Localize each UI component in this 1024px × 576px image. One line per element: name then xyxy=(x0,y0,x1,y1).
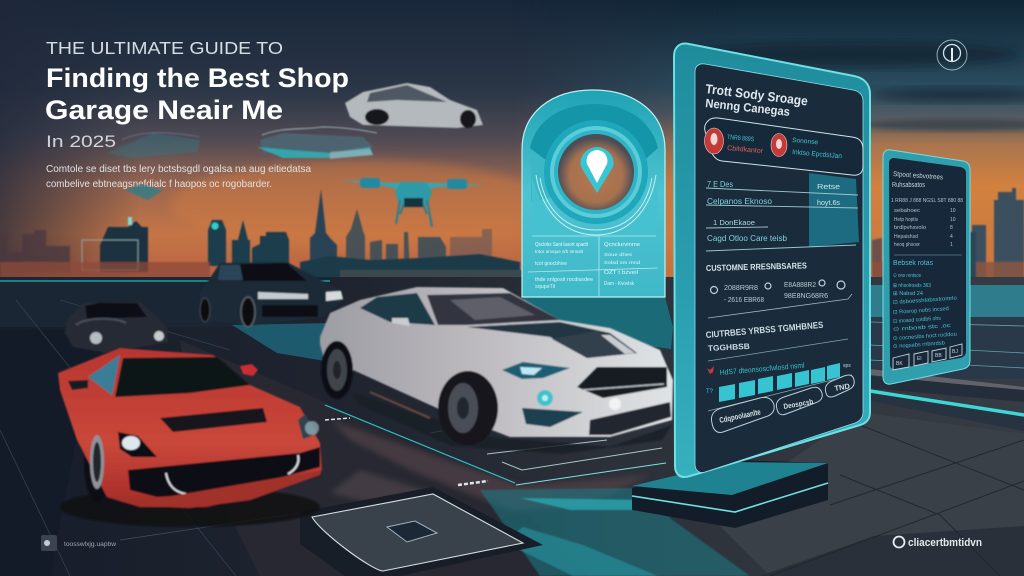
side panel list xyxy=(893,260,957,350)
year subtitle: In 2025 xyxy=(46,132,116,151)
side panel buttons: BK xyxy=(896,361,903,367)
floor charging pad xyxy=(300,487,543,576)
arch info text: squpsTil xyxy=(535,284,555,290)
side panel table: sebahoec xyxy=(894,208,921,214)
side panel buttons xyxy=(893,344,962,370)
customer reviews section xyxy=(706,260,845,304)
drone xyxy=(340,178,487,227)
features section: sps xyxy=(843,363,851,369)
arch info text: tntor anvque s/b smsalt xyxy=(535,249,584,254)
eyebrow heading: THE ULTIMATE GUIDE TO xyxy=(46,38,283,58)
recommended shops card: Cbitdkantor xyxy=(727,145,764,155)
customer reviews section: CUSTOMNE RRESNBSARES xyxy=(706,260,807,273)
water and lounge strip on the right xyxy=(870,285,1024,431)
side panel list: ⊞ Nabsd 24 xyxy=(893,291,923,297)
side panel heading: Stpoot esbvotrees xyxy=(893,171,944,182)
panel: location arch hologram xyxy=(522,90,673,349)
main title line 1: Finding the Best Shop xyxy=(46,63,349,93)
customer reviews section: E8A888R2 xyxy=(784,280,816,289)
side panel list: ⊙ nogsabs rnbnrdsb xyxy=(893,340,945,350)
side panel list: ⊙ ons rontsos xyxy=(893,273,921,279)
rating swatches xyxy=(719,363,840,402)
main title line 2: Garage Neair Me xyxy=(45,95,283,125)
arch info text: Soue dhes xyxy=(604,252,633,257)
side panel list: Bebsek rotas xyxy=(893,260,933,267)
action buttons: Deospcsb xyxy=(783,397,814,411)
side panel list: ⊡ moaod cotdb6 ohs xyxy=(893,316,941,325)
title block xyxy=(45,38,349,190)
floating silver car xyxy=(345,83,483,128)
price comparison table: 7 E Des xyxy=(707,180,733,189)
car: red sports car xyxy=(58,348,322,527)
icon: brand mark xyxy=(894,536,904,548)
background: dusk sky xyxy=(0,0,1024,300)
footer brand bottom right: cliacertbmtidvn xyxy=(908,537,982,549)
side panel list: ⊙ rnbosb stc .oc xyxy=(893,323,951,333)
side panel list: ⊡ dsboesshtabsstromrlo xyxy=(893,296,957,306)
icon: info badge top right xyxy=(937,40,967,70)
action buttons: TND xyxy=(834,381,851,393)
price comparison table: Cagd Otloo Care teisb xyxy=(707,234,788,243)
features section: T? xyxy=(706,389,714,395)
recommended shops card xyxy=(704,118,863,175)
customer reviews section: - 2616 EBR68 xyxy=(724,295,764,304)
side panel table: 1 xyxy=(950,242,953,248)
hologram car outlines xyxy=(107,127,377,200)
panel stand base xyxy=(632,460,828,528)
action buttons xyxy=(711,375,854,433)
map circle xyxy=(558,134,634,210)
intro paragraph: Comtole se diset tbs lery bctsbsgdl ogalsa na aug eitiedatsa xyxy=(46,163,311,175)
price comparison table: Retse xyxy=(817,184,840,191)
icon: location pin xyxy=(580,147,614,193)
side panel buttons: BJ xyxy=(952,349,958,355)
footer tag bottom left: toosswlxjg.uapbw xyxy=(64,541,116,548)
floor xyxy=(0,277,1024,576)
side panel heading: Ruhsabsatos xyxy=(892,182,925,189)
side panel table: Hepaishsd xyxy=(894,234,918,240)
city skyline xyxy=(0,188,1024,290)
arch info text xyxy=(528,236,658,296)
price comparison table: Celpanos Eknoso xyxy=(707,197,773,206)
panel: side comparison screen xyxy=(883,150,970,384)
car: white muscle car xyxy=(320,287,673,454)
side panel table: brdlpvhsvolo xyxy=(894,225,926,231)
arch info text: thde snlgosit rocdissdee xyxy=(535,277,593,283)
icon: red shop badge 2 xyxy=(771,134,787,156)
arch info text: OZT t bzveil xyxy=(604,270,638,276)
side panel table: heoq phsoor xyxy=(894,242,920,248)
features section: TGGHBSB xyxy=(708,342,750,353)
features section xyxy=(705,320,852,411)
arch info text: Dam - Kvovlsk xyxy=(604,281,634,287)
recommended shops card: Sononse xyxy=(792,137,819,146)
side panel table: 10 xyxy=(950,208,956,214)
price comparison table: 1 DonEkaoe xyxy=(713,218,755,227)
recommended shops card: TNR8 889S xyxy=(727,134,755,143)
arch info text: Solsd sm mnd xyxy=(604,260,641,265)
features section: HdS7 dteonsoscfwlosd nsml xyxy=(719,361,805,377)
side panel list: ⊙ cocnesibs hoct rocldou xyxy=(893,332,957,342)
side panel buttons: El xyxy=(917,356,921,362)
features section: CIUTRBES YRBSS TGMHBNES xyxy=(705,320,824,340)
price comparison table: hoyt.6s xyxy=(817,200,840,207)
arch info text: Qsclobs Sant lasort spadit xyxy=(535,242,589,248)
customer reviews section: 2088R9R8 xyxy=(724,283,758,292)
arch info text: tcot goocbhive xyxy=(535,261,567,267)
side panel table: 4 xyxy=(950,234,953,240)
side panel table: Hetp hoptis xyxy=(894,217,918,223)
side panel table: 1 RR88 J 888 NGSL S8T 880 88 xyxy=(891,198,963,204)
side panel buttons: BB xyxy=(935,353,942,359)
arch info text: Qcnclurvinme xyxy=(604,242,640,248)
customer reviews section: 98E8NG68R6 xyxy=(784,291,828,300)
side panel heading xyxy=(892,171,944,189)
price comparison table xyxy=(706,173,859,251)
side panel list: ⊞ nhsolrosds 363 xyxy=(893,283,931,289)
intro paragraph line 2: combelive ebtneagsnefdialc f haopos oc rogobarder. xyxy=(46,178,272,190)
icon: red shop badge 1 xyxy=(704,128,724,154)
side panel table: 8 xyxy=(950,225,953,231)
icon: settings badge xyxy=(41,535,57,551)
panel heading: Nenng Canegas xyxy=(705,96,791,119)
footer tag bottom left xyxy=(41,535,116,551)
car: dark blue sedan xyxy=(200,262,343,327)
side panel list: ⊡ Rosrop nobs incsed xyxy=(893,306,949,316)
floor glow and road markings xyxy=(120,405,750,576)
car: black distant coupe xyxy=(65,302,168,353)
side panel table xyxy=(891,198,963,255)
icon: review pins xyxy=(710,280,845,294)
side panel table: 10 xyxy=(950,217,956,223)
panel: main garage directory screen xyxy=(674,44,870,477)
action buttons: Cdqpoolaanlte xyxy=(719,407,762,425)
panel heading: Trott Sody Sroage xyxy=(705,81,809,109)
recommended shops card: Inktso EpcdstJan xyxy=(792,149,842,160)
